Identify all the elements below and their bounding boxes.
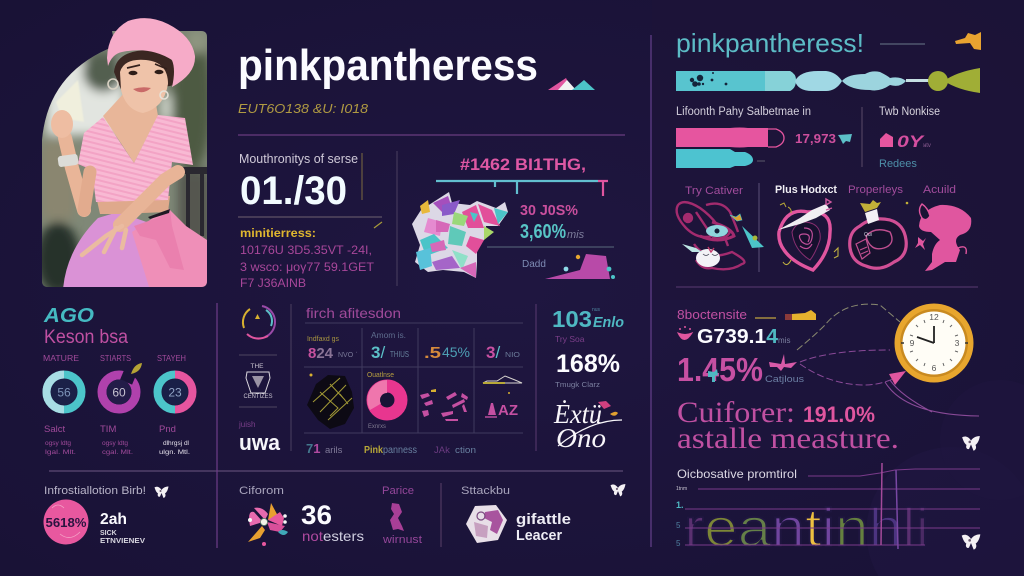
minitierress text block: minitierress: <box>240 226 316 240</box>
icon: butterfly <box>154 486 168 498</box>
column labels <box>685 184 956 197</box>
panel: left donuts <box>43 305 193 456</box>
cell: 3/ <box>371 331 409 362</box>
value: ᴚtv <box>923 143 931 149</box>
script logo <box>553 399 622 453</box>
line chart: 1. <box>676 500 684 510</box>
minitierress text block: F7 J36AINB <box>240 276 306 290</box>
title accent shapes <box>548 78 595 90</box>
horizontal mid divider <box>49 470 623 472</box>
icon: hexagon emblem <box>466 505 507 543</box>
big percent: 1.45% <box>677 351 763 388</box>
cell: 3/: THIUS <box>390 350 409 359</box>
heading: #1462 BI1THG, <box>460 155 586 174</box>
icon: shield badge: THE <box>250 363 264 370</box>
small captions: lgal. Mlt. <box>45 449 76 456</box>
value <box>552 306 624 332</box>
value <box>795 132 852 146</box>
cell: 824: Indfaxd gs <box>307 336 339 343</box>
small marks <box>755 310 816 320</box>
panel: top right <box>676 28 981 272</box>
line chart <box>676 463 980 558</box>
bow <box>134 210 184 270</box>
icon: butterfly <box>962 436 980 451</box>
logo text: uwa <box>239 430 281 455</box>
donut 60: 60 <box>112 386 126 400</box>
donut 56 <box>46 374 82 410</box>
dashed connectors <box>797 304 900 385</box>
skirt right <box>132 208 207 290</box>
donut captions: Pnd <box>159 424 176 435</box>
label: Try Soa <box>555 334 585 344</box>
minitierress text block: 10176U 3D5.35VT -24I, <box>240 243 372 257</box>
icon: blob with crown <box>850 200 908 268</box>
grid footer labels: 71 <box>306 441 320 456</box>
label: wirnust <box>382 534 422 546</box>
glass <box>56 80 84 122</box>
icon: gold splash <box>955 32 981 50</box>
label: gifattle <box>516 511 571 528</box>
icon: hat and bird <box>677 202 764 269</box>
bars: pink and teal <box>676 128 784 168</box>
photo: portrait of pinkpantheress in pink outfit <box>36 18 212 294</box>
icon: pink house <box>880 133 893 147</box>
stat 2ah <box>100 511 145 545</box>
stat number: 01./30 <box>240 169 347 213</box>
cell: 45% <box>424 344 470 362</box>
stat value: mis <box>778 336 790 345</box>
panel: icon column <box>238 306 281 455</box>
teal bracket <box>436 181 608 196</box>
donut captions <box>44 424 176 435</box>
label <box>516 511 571 544</box>
skirt left <box>63 214 149 287</box>
donut labels <box>43 353 186 363</box>
column labels: Try Cativer <box>685 185 743 197</box>
icon: butterfly <box>962 534 980 550</box>
icon: wall clock: 9 <box>910 338 915 348</box>
big number: 168% <box>556 350 620 378</box>
label and pie: Ouatlnse <box>367 372 394 379</box>
stat 2ah: 2ah <box>100 511 127 528</box>
hair <box>114 50 176 92</box>
donut 23 <box>158 374 192 410</box>
cell: 824 <box>307 336 357 362</box>
icon: pink bow <box>769 354 797 371</box>
label: juish <box>238 420 255 429</box>
donut captions: Salct <box>44 424 65 435</box>
statement heading: Cuiforer: <box>677 396 795 429</box>
hat <box>107 18 195 87</box>
label: Catjlous <box>765 374 804 385</box>
statement heading: astalle measture. <box>677 422 899 455</box>
statement heading <box>677 396 899 455</box>
chart and AZ <box>483 376 522 419</box>
heading: firch afitesdon <box>306 305 401 321</box>
title: pinkpantheress: pinkpantheress <box>238 41 538 90</box>
stat 2ah: ETNVIENEV <box>100 538 145 545</box>
column labels: Plus Hodxct <box>775 184 837 196</box>
panel: birth stat with map <box>412 155 615 279</box>
stat 36 <box>301 500 364 544</box>
icon: pink mouse <box>915 204 971 271</box>
main vertical divider <box>650 35 652 547</box>
subtitle: EUT6O138 &U: I018 <box>238 101 369 116</box>
bracelet <box>57 154 79 167</box>
stat pair <box>520 202 585 243</box>
icon: wall clock: 12 <box>929 312 939 322</box>
panel: stackbu footer <box>461 485 571 544</box>
donut 60 <box>102 363 142 409</box>
arc to right <box>885 380 979 416</box>
top <box>78 115 193 202</box>
icon: black maze blob <box>307 374 354 429</box>
heading: Infrostiallotion Birb! <box>44 485 146 497</box>
donut captions: TIM <box>100 424 116 435</box>
small captions: ogsy ldtg <box>102 440 128 447</box>
icon: smile <box>678 326 692 340</box>
marker <box>889 371 906 385</box>
value: 103 <box>552 306 592 332</box>
small captions: ulgn. Mtl. <box>159 449 190 456</box>
icon: blob with crown: Qui <box>864 232 872 238</box>
label and pie <box>367 372 401 430</box>
cell: 3/ pink: 3/ <box>486 343 500 362</box>
cell: 3/ pink <box>486 343 521 362</box>
statement heading: 191.0% <box>803 402 875 427</box>
icon: wall clock <box>894 304 974 382</box>
face <box>120 60 168 113</box>
script logo: Ono <box>556 423 606 453</box>
heading: Sttackbu <box>461 485 510 497</box>
donut labels: STAYEH <box>157 353 186 363</box>
grid lines <box>304 323 523 433</box>
icon: heart <box>778 199 838 270</box>
label: Tmugk Clarz <box>555 380 600 389</box>
midriff <box>96 196 170 214</box>
hand raised <box>51 110 73 138</box>
cell: 3/: 3/ <box>371 343 385 362</box>
panel: top right: Twb Nonkise <box>879 106 940 118</box>
heading: Ciforom <box>239 485 284 497</box>
icon: patchwork map collage <box>412 192 508 278</box>
heading: AGO <box>43 305 94 327</box>
stat pair: mis <box>567 229 585 241</box>
cell: 3/: Amom is. <box>371 331 406 340</box>
neck and chest <box>103 92 158 163</box>
stat pair: 3,60% <box>520 221 566 243</box>
chart heading: Oicbosative promtirol <box>677 467 797 481</box>
pink circle stat: 5618% <box>46 515 87 530</box>
small captions: dlhrgsj dl <box>163 440 190 447</box>
minitierress text block <box>240 226 375 290</box>
small captions: ogsy ldtg <box>45 440 71 447</box>
value: nus <box>592 307 601 313</box>
grid footer labels: ction <box>455 445 476 456</box>
stat label: Mouthronitys of serse <box>239 152 358 166</box>
line chart: 5 <box>676 521 681 530</box>
grid footer labels: arils <box>325 445 343 456</box>
panel: 168% stat <box>552 306 624 453</box>
donut labels: STIARTS <box>100 353 131 363</box>
subheading: Keson bsa <box>44 327 128 348</box>
value: Enlo <box>593 314 624 331</box>
icon: shield badge: CENTIZES <box>244 393 273 400</box>
left arm <box>65 138 84 210</box>
icon: flower <box>248 503 288 546</box>
label and pie: Exnrxs <box>368 424 386 430</box>
icon: ring chart <box>243 306 275 339</box>
heading: Parice <box>382 485 414 497</box>
cell: 45%: .5 <box>424 345 441 362</box>
heading: pinkpantheress! <box>676 28 864 58</box>
panel: infrastructure footer <box>44 485 168 545</box>
donut labels: MATURE <box>43 353 79 363</box>
chart and AZ: AZ <box>498 402 518 419</box>
divider <box>238 134 625 136</box>
icon: wall clock: 6 <box>932 363 937 373</box>
heading: 8boctensite <box>677 308 747 322</box>
right arm <box>120 172 178 225</box>
donut 56: 56 <box>57 386 71 400</box>
value: 0Y <box>897 132 925 151</box>
value <box>897 132 931 151</box>
icon: shield badge <box>244 363 273 400</box>
cell: 45%: 45% <box>442 344 470 360</box>
script logo: Ėxtü <box>553 399 602 429</box>
label: Leacer <box>516 527 562 544</box>
value: 17,973 <box>795 132 836 146</box>
mountain chart <box>545 254 615 279</box>
stat 36: notesters <box>302 528 364 544</box>
grid footer labels: Pinkpanness <box>364 445 417 456</box>
cell: 3/ pink: NIO <box>505 352 521 359</box>
column labels: Properleys <box>848 184 904 196</box>
bar: long gradient shape <box>676 68 980 93</box>
grid footer labels <box>306 441 476 456</box>
icon: wall clock: 3 <box>955 338 960 348</box>
stat value: G739.14 <box>697 326 779 348</box>
small captions: cgal. Mlt. <box>102 449 133 456</box>
panel: monthly stat <box>238 152 382 290</box>
label: Lifoonth Pahy Salbetmae in <box>676 106 811 118</box>
minitierress text block: 3 wsco: μoγ77 59.1GET <box>240 260 375 274</box>
donut 23: 23 <box>168 386 182 400</box>
grid footer labels: JAk <box>434 445 450 456</box>
chart letters: reantinhli <box>684 498 929 558</box>
panel: bottom right <box>676 304 980 558</box>
Dadd label: Dadd <box>522 259 546 270</box>
panel: stats grid <box>304 305 523 456</box>
stat 2ah: SICK <box>100 530 117 537</box>
stat 36: 36 <box>301 500 332 530</box>
line chart: 1tnm <box>676 486 687 492</box>
earrings <box>108 79 118 89</box>
panel: ciforom footer <box>239 485 422 546</box>
cell: 824: 824 <box>308 345 334 362</box>
column labels: Acuild <box>923 184 956 196</box>
small captions <box>45 440 190 456</box>
pink confetti marks <box>420 389 468 421</box>
icon: butterfly <box>611 484 625 496</box>
line chart: 5 <box>676 539 681 548</box>
label: Redees <box>879 158 917 170</box>
cell: 824: NVO ˈ <box>338 351 357 359</box>
icon: pink figure <box>390 503 404 531</box>
stat pair: 30 J0S% <box>520 202 578 219</box>
icon: leaf <box>131 363 142 374</box>
